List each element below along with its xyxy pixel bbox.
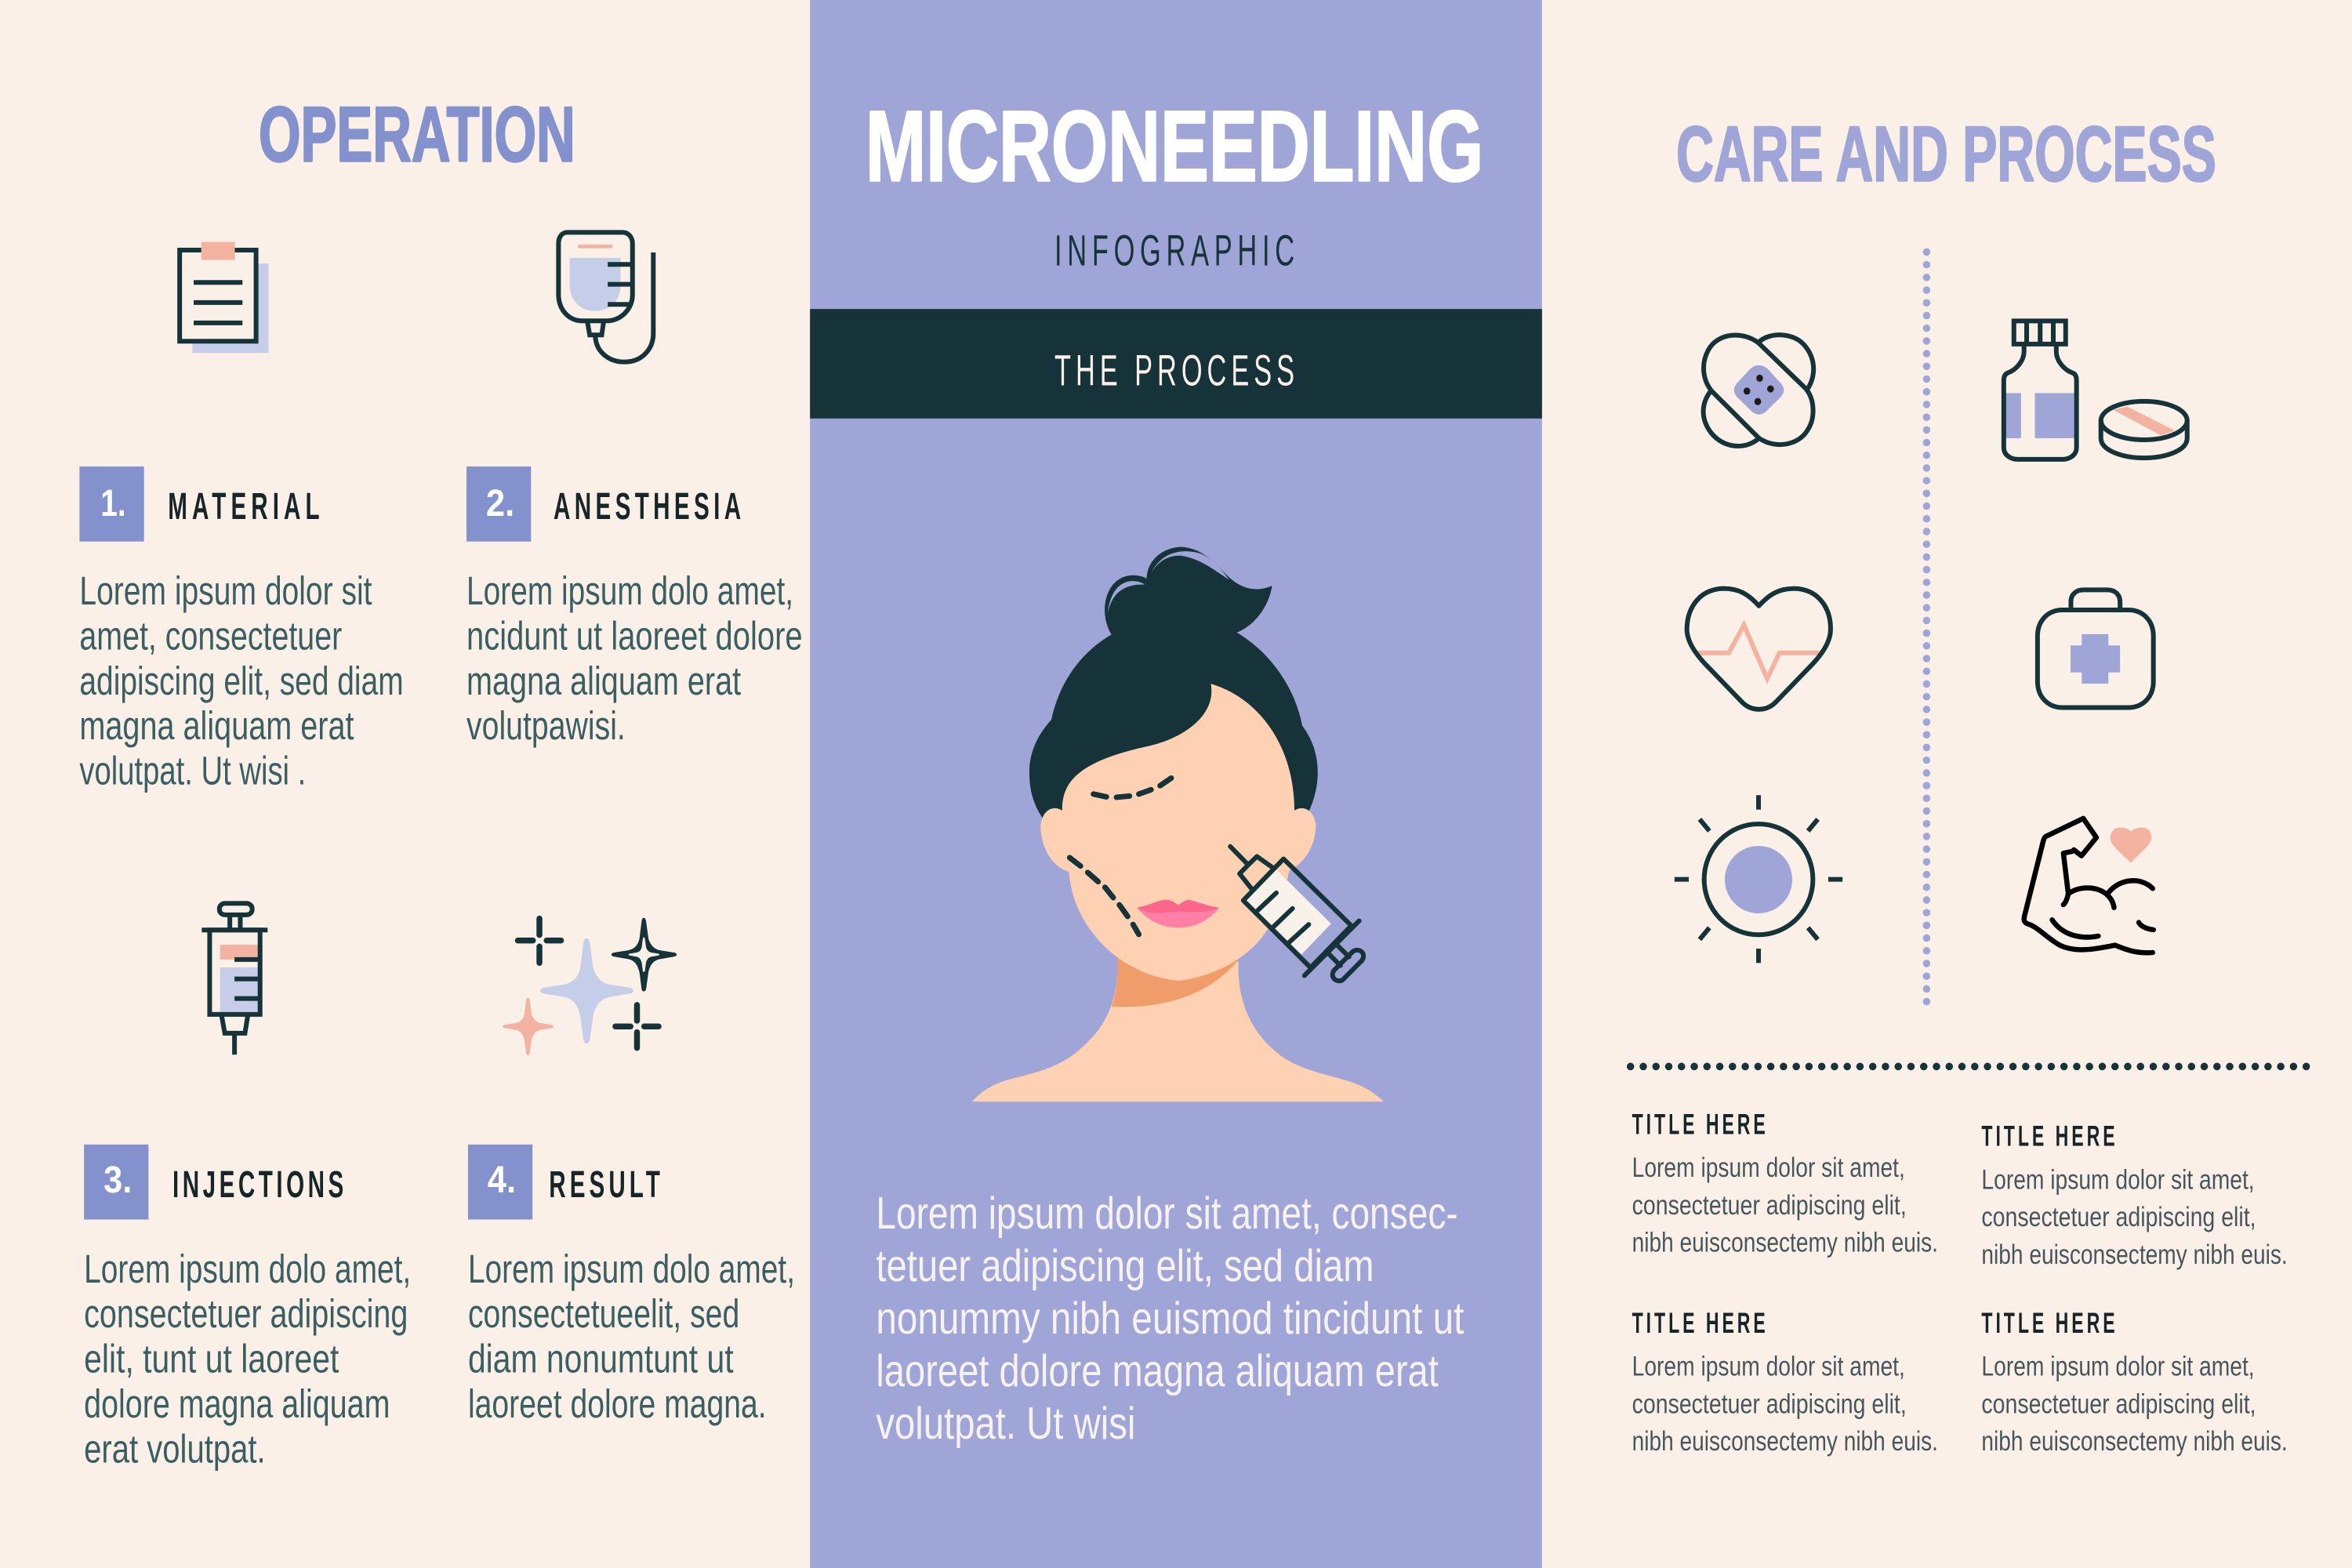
- item title: TITLE HERE: [1981, 1306, 2115, 1339]
- heading: material: MATERIAL: [168, 486, 320, 528]
- icon: bandage: [1704, 335, 1813, 446]
- item text: Lorem ipsum dolor sit amet,: [1632, 1350, 1905, 1381]
- number 1: 1.: [100, 483, 126, 524]
- icon: medical kit: [2038, 590, 2154, 708]
- item text: nibh euisconsectemy nibh euis.: [1632, 1425, 1938, 1457]
- icon: sun: [1675, 795, 1842, 963]
- item text: [1981, 1163, 2288, 1270]
- illustration: woman's face with syringe: [972, 547, 1384, 1102]
- centre description: Lorem ipsum dolor sit amet, consec-: [876, 1189, 1458, 1239]
- item text: consectetuer adipiscing elit,: [1632, 1189, 1907, 1221]
- number 4: 4.: [488, 1160, 516, 1201]
- number badge 2: [466, 466, 531, 542]
- item text: [1632, 1152, 1938, 1258]
- body text: consectetuer adipiscing: [84, 1291, 408, 1336]
- number badge 1: [79, 466, 144, 542]
- care item: top right: [1981, 1120, 2288, 1270]
- item text: consectetuer adipiscing elit,: [1632, 1388, 1907, 1419]
- item text: [1981, 1350, 2288, 1457]
- item text: Lorem ipsum dolor sit amet,: [1981, 1163, 2255, 1195]
- vertical dotted divider: [1925, 252, 1929, 1002]
- item text: Lorem ipsum dolor sit amet,: [1981, 1350, 2255, 1381]
- body text: ncidunt ut laoreet dolore: [466, 613, 803, 658]
- body text: [84, 1247, 411, 1471]
- centre description: [876, 1189, 1464, 1449]
- icon: clipboard: [180, 242, 268, 353]
- band label: the process: THE PROCESS: [1054, 346, 1294, 395]
- heading: operation: OPERATION: [259, 92, 575, 179]
- item text: consectetuer adipiscing elit,: [1981, 1388, 2256, 1419]
- item text: consectetuer adipiscing elit,: [1981, 1201, 2256, 1232]
- body text: consectetueelit, sed: [468, 1291, 739, 1336]
- ears and face: [1040, 684, 1316, 981]
- hair: [1029, 547, 1318, 842]
- icon: strong arm with heart: [2024, 818, 2154, 953]
- item title: TITLE HERE: [1981, 1120, 2115, 1152]
- body text: laoreet dolore magna.: [468, 1381, 767, 1426]
- incision dashes: [1069, 778, 1171, 935]
- body text: elit, tunt ut laoreet: [84, 1337, 339, 1381]
- title: microneedling: MICRONEEDLING: [866, 91, 1483, 203]
- lips: [1137, 900, 1219, 927]
- body text: magna aliquam erat: [79, 703, 354, 748]
- body text: [466, 568, 803, 748]
- number 2: 2.: [486, 483, 514, 524]
- body text: diam nonumtunt ut: [468, 1337, 734, 1381]
- centre description: tetuer adipiscing elit, sed diam: [876, 1241, 1374, 1291]
- care item: bottom right: [1981, 1306, 2288, 1457]
- icon: heart with pulse: [1687, 589, 1831, 710]
- step 1: material: [79, 466, 404, 793]
- body text: dolore magna aliquam: [84, 1381, 390, 1426]
- step 2: anesthesia: [466, 466, 803, 748]
- item text: Lorem ipsum dolor sit amet,: [1632, 1152, 1905, 1183]
- heading: result: RESULT: [549, 1164, 660, 1206]
- care item: top left: [1632, 1108, 1938, 1258]
- neck shadow: [1112, 957, 1239, 1007]
- icon: iv bag: [558, 232, 653, 362]
- centre description: nonummy nibh euismod tincidunt ut: [876, 1294, 1464, 1344]
- body text: Lorem ipsum dolo amet,: [466, 568, 793, 613]
- item text: [1632, 1350, 1938, 1457]
- syringe: [1230, 847, 1363, 981]
- hair highlights: [1108, 551, 1229, 615]
- panel: the process band: [810, 309, 1542, 419]
- body text: Lorem ipsum dolor sit: [79, 568, 372, 613]
- body text: Lorem ipsum dolo amet,: [84, 1247, 411, 1291]
- panel: centre column: [810, 0, 1542, 1568]
- item text: nibh euisconsectemy nibh euis.: [1632, 1227, 1938, 1258]
- body text: [79, 568, 404, 793]
- body text: adipiscing elit, sed diam: [79, 659, 404, 703]
- item title: TITLE HERE: [1632, 1306, 1766, 1339]
- care item: bottom left: [1632, 1306, 1938, 1457]
- body text: Lorem ipsum dolo amet,: [468, 1247, 795, 1291]
- body text: [468, 1247, 795, 1426]
- centre description: laoreet dolore magna aliquam erat: [876, 1346, 1439, 1396]
- icon: bottle and pill: [2004, 321, 2187, 459]
- body text: magna aliquam erat: [466, 659, 741, 703]
- heading: injections: INJECTIONS: [172, 1164, 343, 1206]
- heading: anesthesia: ANESTHESIA: [554, 486, 741, 528]
- centre description: volutpat. Ut wisi: [876, 1399, 1135, 1449]
- body text: amet, consectetuer: [79, 613, 342, 658]
- number badge 3: [84, 1145, 148, 1219]
- number 3: 3.: [103, 1160, 132, 1201]
- item title: TITLE HERE: [1632, 1108, 1766, 1141]
- step 3: injections: [84, 1145, 411, 1471]
- icon: sparkles: [503, 918, 677, 1055]
- body text: erat volutpat.: [84, 1426, 266, 1471]
- horizontal dotted divider: [1631, 1065, 2310, 1069]
- icon: syringe: [201, 903, 267, 1054]
- body text: volutpat. Ut wisi .: [79, 749, 306, 793]
- step 4: result: [468, 1145, 795, 1426]
- subtitle: infographic: INFOGRAPHIC: [1054, 226, 1294, 275]
- number badge 4: [468, 1145, 532, 1219]
- neck and shoulders: [972, 962, 1384, 1102]
- body text: volutpawisi.: [466, 703, 626, 748]
